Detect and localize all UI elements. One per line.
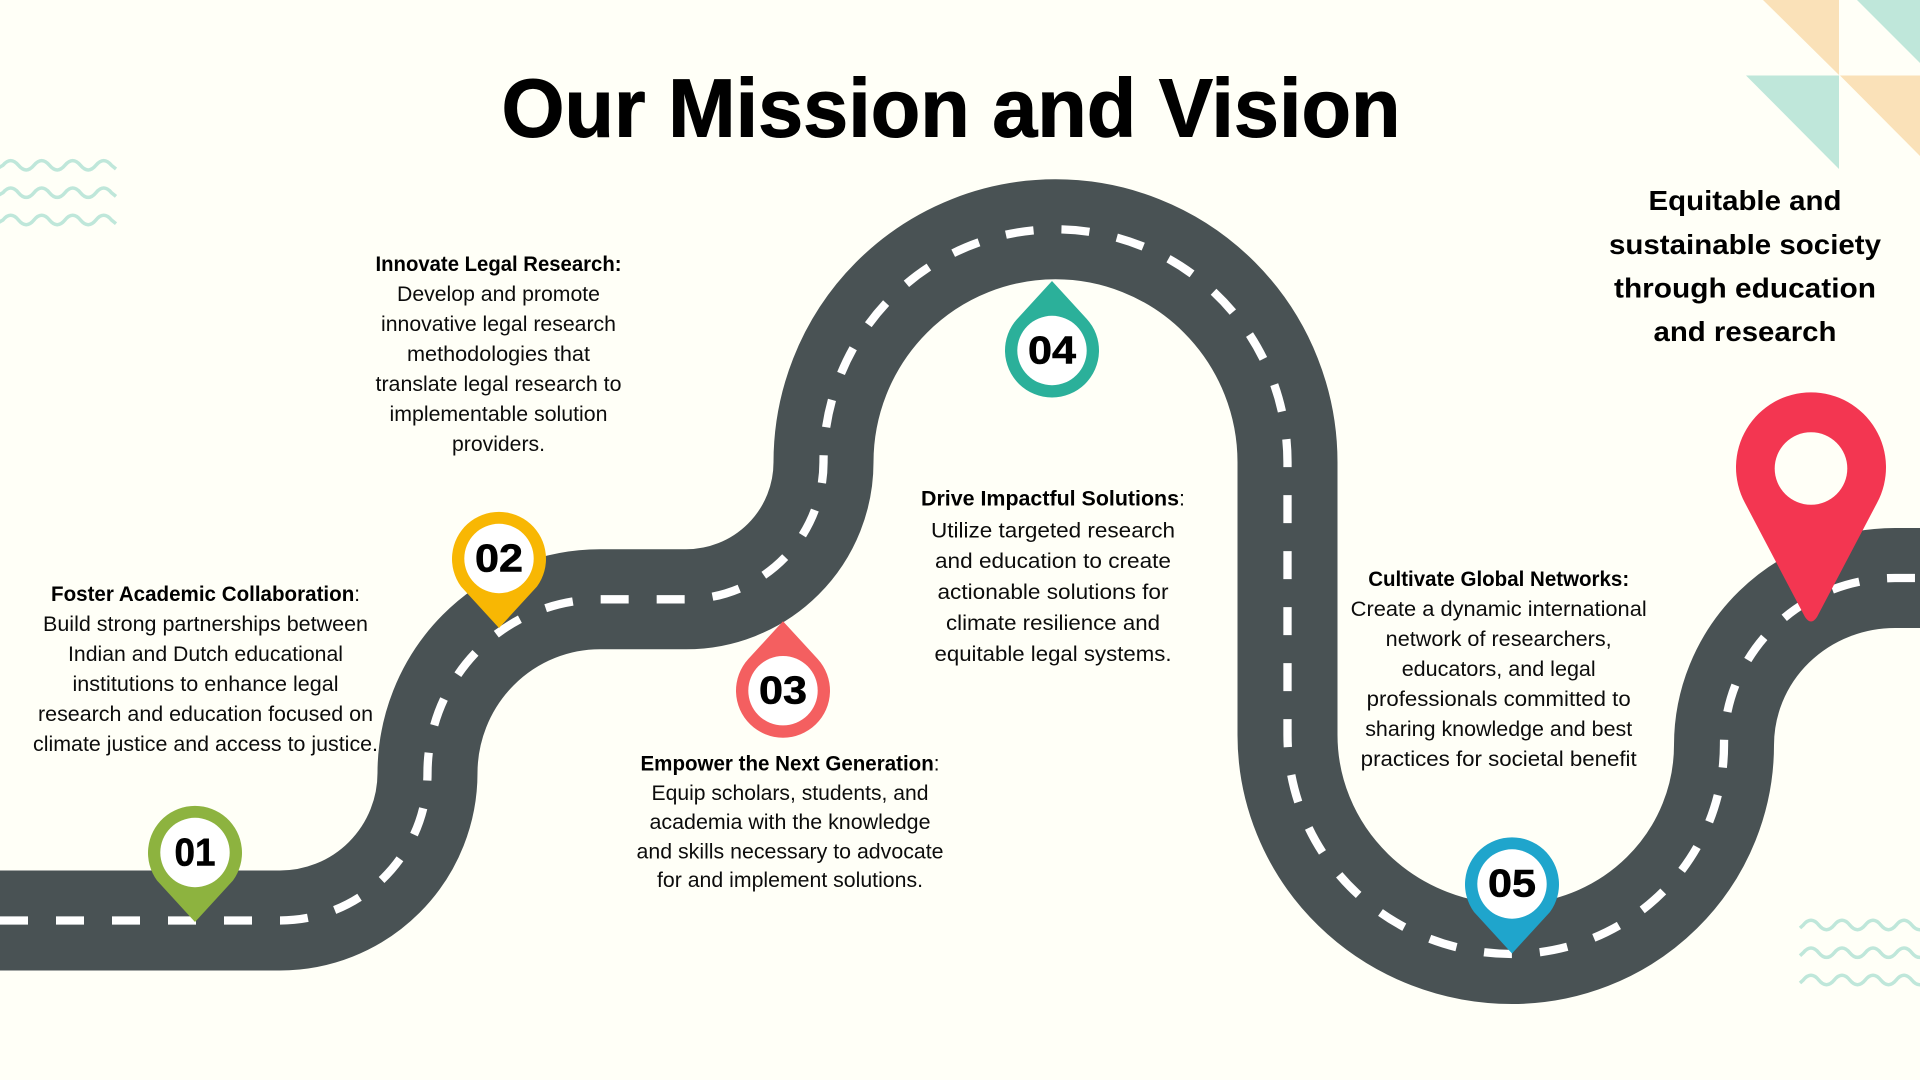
text block 03: Empower the Next Generation: Empower the Next Generation: xyxy=(640,752,940,776)
text block 05: Cultivate Global Networks: Create a dynamic international xyxy=(1351,597,1647,621)
vision statement xyxy=(1609,185,1882,347)
text block 03: Empower the Next Generation: for and implement solutions. xyxy=(657,868,923,892)
text block 02: Innovate Legal Research: translate legal research to xyxy=(376,372,622,396)
text block 01: Foster Academic Collaboration: research and education focused on xyxy=(38,702,373,726)
title: Our Mission and Vision xyxy=(502,62,1400,155)
text block 01: Foster Academic Collaboration: institutions to enhance legal xyxy=(72,672,338,696)
text block 02: Innovate Legal Research: methodologies that xyxy=(407,342,590,366)
text block 04: Drive Impactful Solutions: climate resilience and xyxy=(946,611,1160,635)
text block 05: Cultivate Global Networks xyxy=(1351,567,1647,771)
pin 03 xyxy=(736,621,830,738)
text block 02: Innovate Legal Research: Develop and promote xyxy=(397,282,600,306)
text block 04: Drive Impactful Solutions: equitable legal systems. xyxy=(934,642,1172,666)
text block 03: Empower the Next Generation: academia with the knowledge xyxy=(650,810,930,834)
pin 04 xyxy=(1005,281,1099,398)
winding road xyxy=(0,229,1920,954)
text block 02: Innovate Legal Research xyxy=(376,252,622,456)
text block 01: Foster Academic Collaboration: Foster Academic Collaboration: xyxy=(51,582,360,606)
text block 05: Cultivate Global Networks: practices for societal benefit xyxy=(1361,747,1637,771)
pin 05 xyxy=(1465,837,1559,954)
text block 03: Empower the Next Generation xyxy=(636,752,944,892)
text block 02: Innovate Legal Research: Innovate Legal Research: xyxy=(376,252,622,276)
text block 01: Foster Academic Collaboration xyxy=(33,582,378,756)
pin 05: 05 xyxy=(1488,862,1536,905)
pin 03: 03 xyxy=(759,670,807,713)
destination pin xyxy=(1736,392,1886,622)
text block 02: Innovate Legal Research: innovative legal research xyxy=(381,312,616,336)
text block 05: Cultivate Global Networks: network of researchers, xyxy=(1386,627,1612,651)
vision statement: sustainable society xyxy=(1609,229,1882,260)
text block 04: Drive Impactful Solutions: Utilize targeted research xyxy=(931,518,1175,542)
vision statement: through education xyxy=(1614,273,1876,304)
text block 04: Drive Impactful Solutions: Drive Impactful Solutions: xyxy=(921,487,1185,511)
text block 04: Drive Impactful Solutions xyxy=(921,487,1185,666)
text block 05: Cultivate Global Networks: professionals committed to xyxy=(1367,687,1631,711)
text block 02: Innovate Legal Research: implementable solution xyxy=(390,402,608,426)
text block 01: Foster Academic Collaboration: climate justice and access to justice. xyxy=(33,732,378,756)
pin 02 xyxy=(452,512,546,628)
pin 04: 04 xyxy=(1028,329,1076,372)
vision statement: Equitable and xyxy=(1648,185,1842,216)
text block 02: Innovate Legal Research: providers. xyxy=(452,432,545,456)
vision statement: and research xyxy=(1654,316,1836,347)
decorative waves right xyxy=(1800,920,1920,985)
text block 01: Foster Academic Collaboration: Indian and Dutch educational xyxy=(68,642,343,666)
text block 01: Foster Academic Collaboration: Build strong partnerships between xyxy=(43,612,368,636)
text block 05: Cultivate Global Networks: educators, and legal xyxy=(1402,657,1596,681)
pin 01 xyxy=(148,806,242,922)
pin 02: 02 xyxy=(475,537,523,580)
text block 03: Empower the Next Generation: and skills necessary to advocate xyxy=(636,839,944,863)
pin 01: 01 xyxy=(174,831,216,874)
text block 04: Drive Impactful Solutions: actionable solutions for xyxy=(938,580,1168,604)
decorative triangles top right xyxy=(1746,0,1920,169)
text block 05: Cultivate Global Networks: sharing knowledge and best xyxy=(1365,717,1632,741)
text block 05: Cultivate Global Networks: Cultivate Global Networks: xyxy=(1368,567,1629,591)
text block 03: Empower the Next Generation: Equip scholars, students, and xyxy=(652,781,928,805)
text block 04: Drive Impactful Solutions: and education to create xyxy=(935,549,1171,573)
decorative waves left xyxy=(0,161,116,225)
